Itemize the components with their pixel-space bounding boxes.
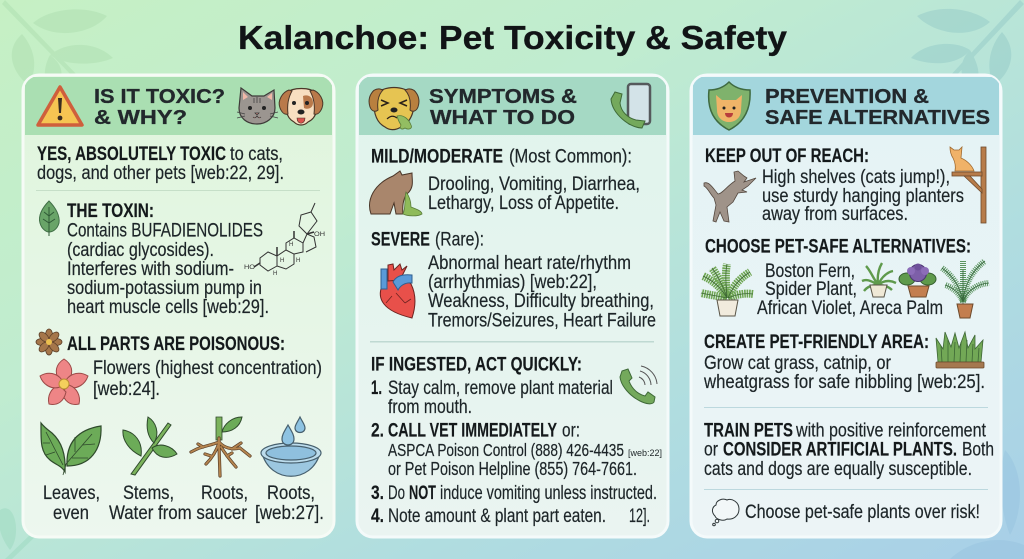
labels: plant parts: Roots, [201, 483, 248, 504]
text: mild moderate [371, 146, 640, 214]
heading: prevention and safe alternatives: PREVENTION & [765, 86, 929, 108]
text: yes absolutely toxic: dogs, and other pets [web:22, 29]. [37, 163, 284, 184]
text: severe [371, 230, 656, 332]
text: if ingested act quickly: or: [562, 420, 580, 442]
panel header band [693, 77, 999, 135]
icon: african violet [899, 264, 936, 297]
icon: shield with dog [709, 82, 750, 130]
icon: brown flower [36, 329, 62, 355]
labels: plant parts [43, 483, 324, 524]
panel: is it toxic and why [23, 75, 334, 537]
text: create pet-friendly area: CREATE PET-FRIENDLY AREA: [704, 332, 929, 353]
heading: symptoms and what to do: WHAT TO DO [430, 107, 575, 129]
text: if ingested act quickly: IF INGESTED, ACT QUICKLY: [371, 354, 582, 376]
text: create pet-friendly area [703, 332, 985, 393]
icon: cat face [237, 88, 278, 124]
text: severe: Tremors/Seizures, Heart Failure [428, 310, 656, 332]
icon: smartphone and handset [611, 84, 650, 128]
text: train pets: Both [962, 440, 994, 460]
text: if ingested act quickly: induce vomiting unless instructed. [440, 483, 657, 504]
text: train pets: with positive reinforcement [795, 420, 987, 442]
heading: is it toxic: IS IT TOXIC? [94, 86, 225, 108]
labels: plant parts: even [53, 503, 89, 524]
chart: steroid molecule [244, 203, 325, 277]
icon: ringing phone [620, 366, 657, 404]
text: if ingested act quickly: 4. [371, 506, 384, 527]
icon: roots [191, 417, 250, 476]
text: train pets: or [704, 440, 719, 460]
text: keep out of reach: away from surfaces. [762, 204, 908, 225]
text: alternative plant names: Boston Fern, [765, 261, 855, 282]
text: if ingested act quickly: NOT [409, 483, 436, 504]
icon: pink flower [40, 359, 88, 404]
text: mild moderate: Drooling, Vomiting, Diarrhea, [428, 174, 640, 195]
text: yes absolutely toxic: to cats, [230, 144, 283, 165]
text: keep out of reach [705, 146, 964, 225]
text: severe: (arrhythmias) [web:22], [428, 272, 597, 293]
text: if ingested act quickly: Note amount & plant part eaten. [388, 506, 606, 527]
chart: steroid molecule: OH [314, 232, 325, 238]
text: mild moderate: Lethargy, Loss of Appetite. [428, 193, 619, 214]
text: the toxin: heart muscle cells [web:29]. [67, 297, 269, 318]
text: keep out of reach: use sturdy hanging planters [762, 186, 964, 207]
text: severe: Weakness, Difficulty breathing, [428, 291, 654, 312]
heading: is it toxic: & WHY? [94, 107, 187, 129]
text: train pets: CONSIDER ARTIFICIAL PLANTS. [723, 440, 957, 460]
text: if ingested act quickly: ASPCA Poison Control (888) 426-4435 [388, 440, 624, 460]
panel header band [25, 77, 332, 135]
heading: symptoms and what to do: SYMPTOMS & [429, 86, 577, 108]
text: severe: Abnormal heart rate/rhythm [428, 253, 631, 274]
text: train pets: TRAIN PETS [704, 420, 793, 442]
icon: sick dog [369, 88, 419, 130]
text: if ingested act quickly: 12]. [629, 506, 650, 527]
text: the toxin: THE TOXIN: [67, 201, 154, 222]
chart: steroid molecule: H [289, 242, 293, 248]
icon: two leaves [41, 423, 101, 475]
labels: plant parts: Roots, [267, 483, 315, 504]
text: if ingested act quickly: from mouth. [388, 397, 472, 418]
text: if ingested act quickly: [web:22] [628, 448, 662, 459]
text: if ingested act quickly: Stay calm, remove plant material [388, 378, 613, 399]
icon: spider plant [862, 263, 896, 297]
icon: warning triangle [38, 87, 82, 125]
text: alternative plant names: African Violet, Areca Palm [757, 298, 943, 319]
chart: steroid molecule: H [273, 271, 277, 277]
icon: jumping cat [704, 171, 756, 222]
text: the toxin: (cardiac glycosides). [67, 240, 214, 261]
icon: water bowl [261, 417, 321, 476]
chart: steroid molecule: H [296, 258, 300, 264]
heading: is it toxic [94, 86, 225, 129]
text: if ingested act quickly: Do [388, 483, 405, 504]
title: Kalanchoe: Pet Toxicity & Safety [238, 19, 788, 56]
text: mild moderate: (Most Common): [509, 146, 632, 168]
text: alternative plant names: Spider Plant, [765, 279, 857, 300]
icon: anatomical heart [380, 264, 415, 318]
labels: plant parts: Stems, [123, 483, 174, 504]
text: keep out of reach: High shelves (cats jump!), [762, 167, 950, 188]
panel header band [359, 77, 666, 135]
text: closing tip: Choose pet-safe plants over risk! [745, 502, 980, 523]
labels: plant parts: Leaves, [43, 483, 100, 504]
text: create pet-friendly area: wheatgrass for safe nibbling [web:25]. [703, 372, 985, 393]
text: if ingested act quickly: 2. [371, 420, 384, 442]
icon: cat grass tray [936, 332, 984, 368]
labels: plant parts: Water from saucer [109, 503, 248, 524]
text: mild moderate: MILD/MODERATE [371, 146, 503, 168]
text: if ingested act quickly [371, 354, 662, 527]
text: the toxin: sodium-potassium pump in [67, 278, 262, 299]
text: the toxin: Contains BUFADIENOLIDES [67, 220, 263, 242]
text: yes absolutely toxic: YES, ABSOLUTELY TOXIC [37, 144, 226, 165]
icon: boston fern [701, 264, 753, 316]
heading: prevention and safe alternatives: SAFE ALTERNATIVES [765, 107, 990, 129]
text: train pets [704, 420, 994, 480]
chart: steroid molecule: HO [244, 265, 255, 271]
icon: leaf [39, 201, 59, 236]
icon: stem [123, 417, 177, 475]
icon: thought bubble [712, 499, 739, 526]
heading: all parts are poisonous: ALL PARTS ARE POISONOUS: [67, 334, 285, 355]
icon: dog face [279, 88, 323, 125]
text: train pets: cats and dogs are equally susceptible. [704, 459, 972, 480]
panel: prevention and safe alternatives [691, 75, 1001, 537]
text: the toxin: Interferes with sodium- [67, 259, 234, 280]
text: flowers [93, 358, 322, 400]
heading: prevention and safe alternatives [765, 86, 990, 129]
panel: symptoms and what to do [357, 75, 668, 537]
text: if ingested act quickly: 1. [371, 378, 382, 399]
labels: plant parts: [web:27]. [255, 503, 324, 524]
text: keep out of reach: KEEP OUT OF REACH: [705, 146, 869, 167]
text: if ingested act quickly: CALL VET IMMEDIATELY [388, 420, 557, 442]
text: flowers: Flowers (highest concentration) [93, 358, 322, 379]
heading: symptoms and what to do [429, 86, 577, 129]
icon: cat on shelf [950, 147, 986, 223]
text: if ingested act quickly: 3. [371, 483, 384, 504]
icon: areca palm [942, 260, 989, 318]
text: alternative plant names [757, 261, 943, 319]
text: severe: (Rare): [435, 230, 484, 250]
text: flowers: [web:24]. [93, 379, 160, 400]
text: severe: SEVERE [371, 230, 430, 250]
text: yes absolutely toxic [37, 144, 284, 184]
text: if ingested act quickly: or Pet Poison Helpline (855) 764-7661. [388, 459, 637, 479]
chart: steroid molecule: H [280, 258, 284, 264]
text: the toxin [67, 201, 269, 318]
icon: vomiting cat [370, 171, 422, 216]
text: create pet-friendly area: Grow cat grass, catnip, or [704, 353, 892, 374]
